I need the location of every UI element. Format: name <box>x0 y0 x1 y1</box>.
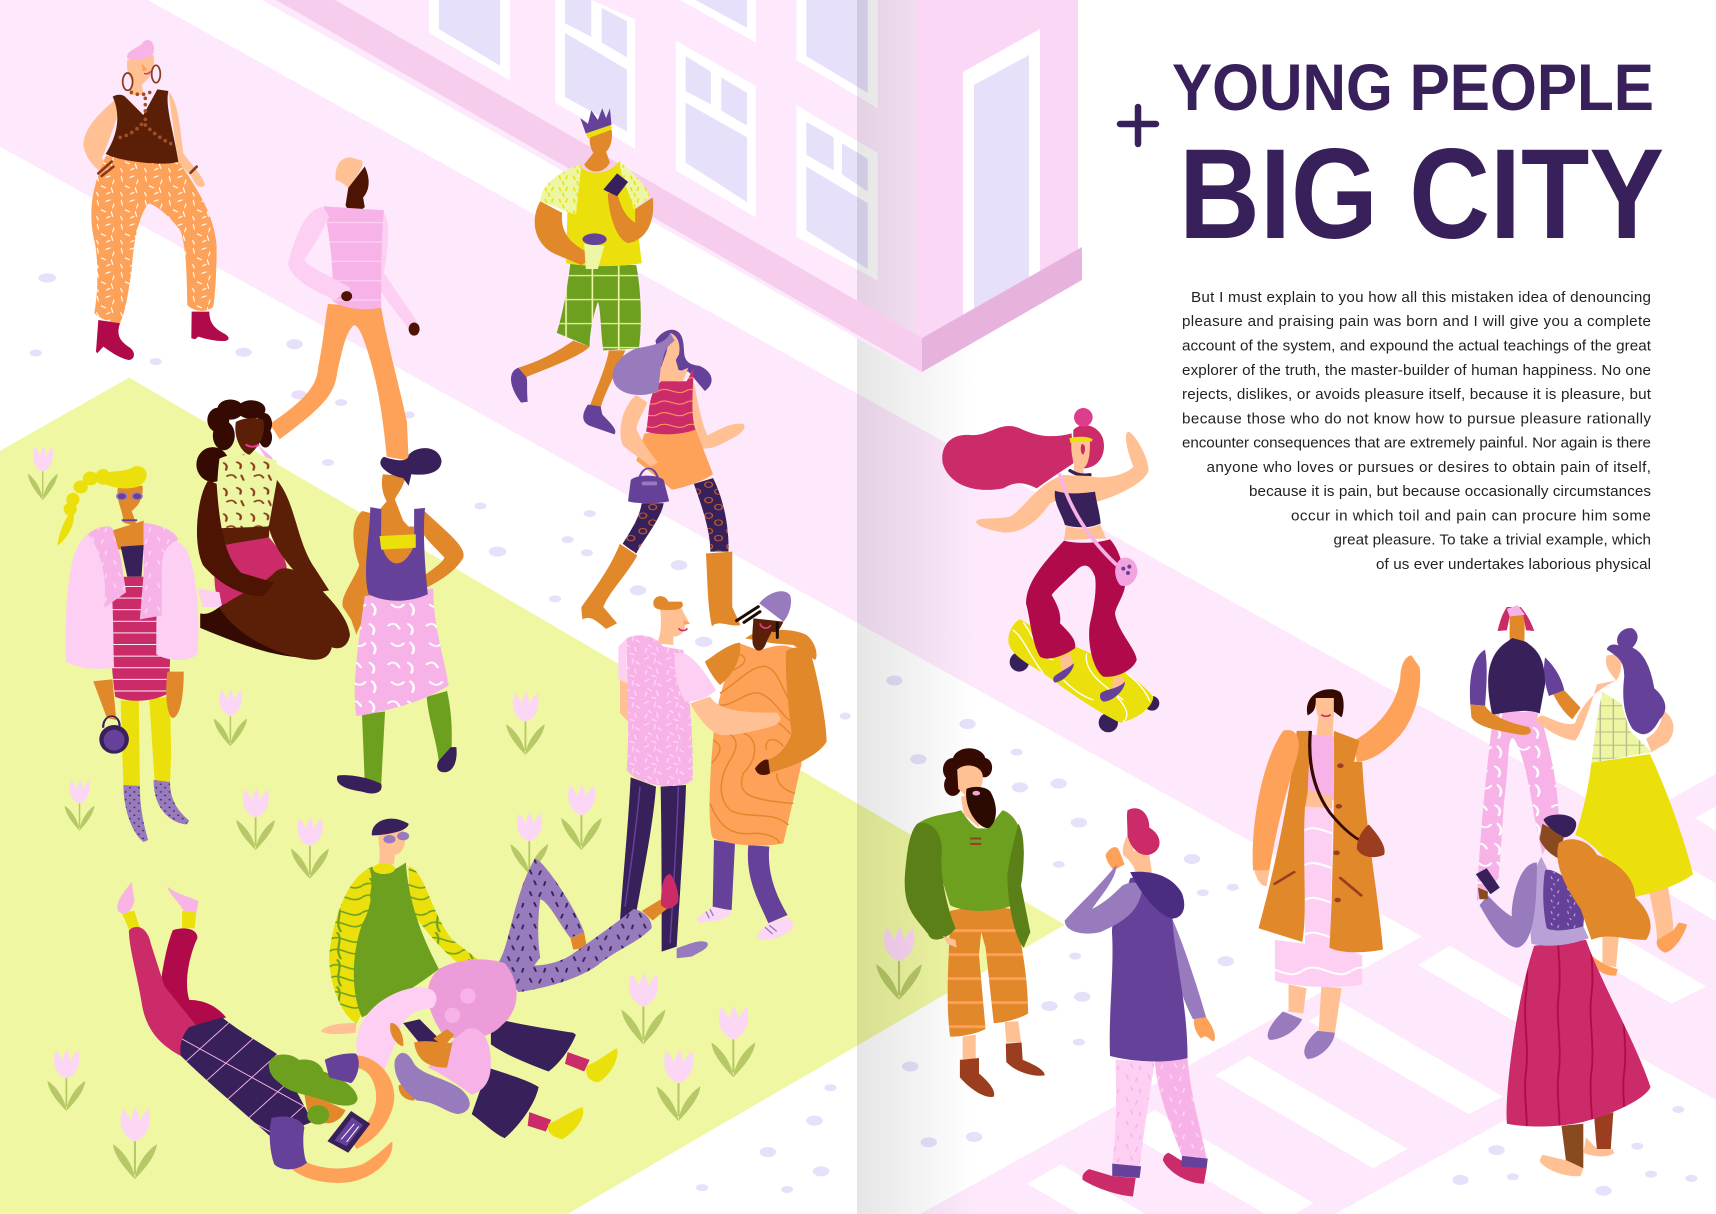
body text paragraph: account of the system, and expound the actual teachings of the great <box>1182 338 1652 354</box>
building front wall <box>330 0 915 338</box>
front ledge <box>276 0 922 372</box>
pavement dots right page <box>886 676 1697 1196</box>
crossbody bag <box>1357 825 1385 857</box>
body text paragraph: because it is pain, but because occasionally circumstances <box>1249 483 1651 500</box>
handbag <box>628 468 669 503</box>
tablet <box>327 1111 370 1153</box>
side wall <box>915 0 1078 338</box>
crosswalk <box>920 774 1716 1214</box>
body text paragraph: encounter consequences that are extremely painful. Nor again is there <box>1182 435 1651 452</box>
pavement dots left page <box>30 273 851 1193</box>
body text paragraph: occur in which toil and pain can procure him some <box>1291 507 1651 524</box>
side window <box>963 29 1040 318</box>
figure: person with pink bob and white-pattern trousers <box>1470 605 1581 901</box>
phone <box>1476 868 1500 894</box>
body text paragraph: because those who do not know how to pursue pleasure rationally <box>1182 410 1651 427</box>
magazine fold shadow <box>857 0 975 1214</box>
figure: woman in yellow skirt with purple hair <box>1534 628 1693 976</box>
figure: woman with backpack and long magenta skirt <box>1476 815 1651 1176</box>
figure: person in purple hoodie <box>1065 808 1215 1197</box>
body text paragraph <box>1182 289 1652 573</box>
body text paragraph: But I must explain to you how all this mistaken idea of denouncing <box>1191 289 1651 306</box>
building windows <box>429 0 878 281</box>
body text paragraph: rejects, dislikes, or avoids pleasure itself, because it is pleasure, but <box>1182 386 1652 403</box>
thin kerb under building <box>262 0 922 375</box>
sling bag <box>1115 558 1137 586</box>
side ledge <box>922 247 1082 372</box>
backpack <box>1543 870 1585 930</box>
body text paragraph: explorer of the truth, the master-builder of human happiness. No one <box>1182 362 1651 379</box>
figure: skater girl with pink hair <box>942 408 1159 732</box>
tulips on the lawn <box>28 446 922 1179</box>
figure: bald walker in striped jumper <box>270 158 420 461</box>
building ledge and side wall <box>262 0 1082 375</box>
figure: woman with lavender hair and handbag <box>581 330 744 629</box>
figure: woman in orange dress with beanie <box>697 591 827 940</box>
grass lawn <box>0 378 1065 1214</box>
round bag <box>99 716 129 754</box>
figure: blonde woman with braid and pink jacket <box>58 466 198 842</box>
figure: woman with bun in purple top and pink skirt <box>337 448 464 793</box>
figure: bearded man in green sweater <box>905 748 1045 1097</box>
body text paragraph: great pleasure. To take a trivial example, which <box>1334 532 1651 549</box>
skateboard <box>1008 619 1159 732</box>
plus sign <box>1120 107 1156 144</box>
figure: man in speckled pink shirt <box>618 596 780 958</box>
figure: curly-haired woman sitting <box>196 399 350 660</box>
figure: man in green tunic sitting on grass <box>321 819 485 1034</box>
figure: woman with pink mohawk <box>83 40 229 360</box>
figure: person lying on stomach reading tablet <box>117 882 394 1183</box>
figure: punk guy with coffee and phone <box>511 108 653 434</box>
body text paragraph: pleasure and praising pain was born and I will give you a complete <box>1182 313 1651 330</box>
figure: person lying down in pink and speckled lavender <box>356 859 678 1139</box>
body text paragraph: of us ever undertakes laborious physical <box>1376 556 1651 573</box>
body text paragraph: anyone who loves or pursues or desires to obtain pain of itself, <box>1206 459 1651 476</box>
figure: waving woman in orange coat <box>1253 655 1420 1059</box>
title: young people: YOUNG PEOPLE <box>1172 50 1654 124</box>
